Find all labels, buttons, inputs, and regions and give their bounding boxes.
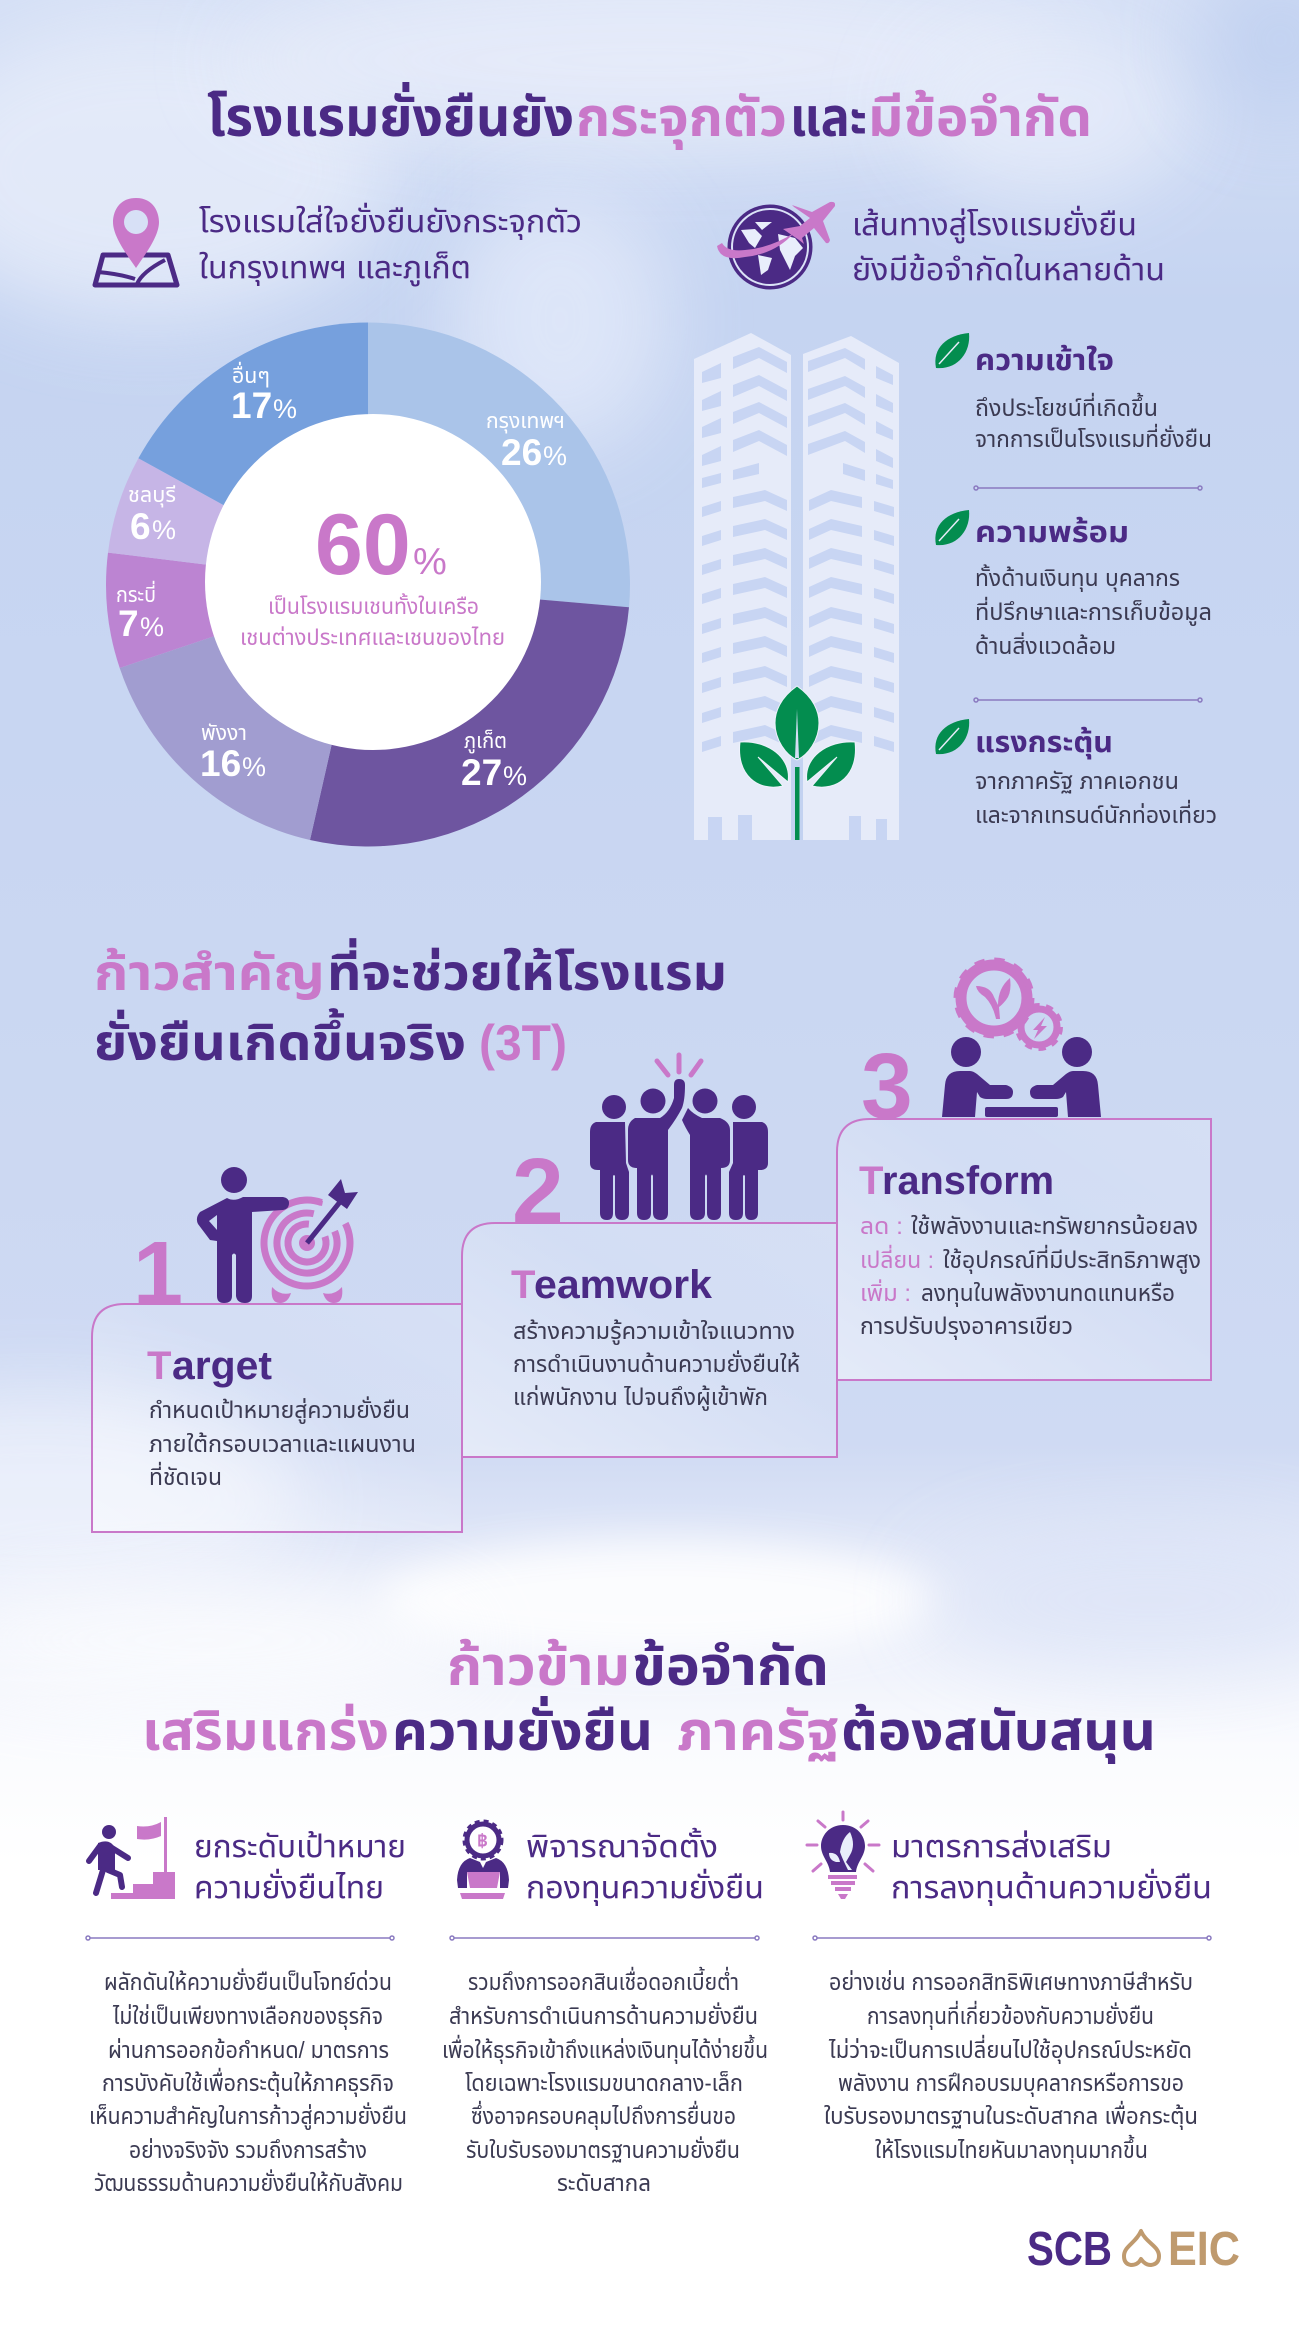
label: Phang Nga: พังงา xyxy=(201,722,247,745)
item: understanding: จากการเป็นโรงแรมที่ยั่งยืน xyxy=(975,423,1212,452)
label: Bangkok: กรุงเทพฯ xyxy=(486,410,565,434)
item: understanding: ถึงประโยชน์ที่เกิดขึ้น xyxy=(975,392,1158,421)
label: Phuket: % xyxy=(503,761,527,791)
card title: T xyxy=(147,1344,171,1388)
item: understanding xyxy=(935,333,1212,452)
subheading: left: โรงแรมใส่ใจยั่งยืนยังกระจุกตัว xyxy=(199,202,582,240)
center stat 60%: เป็นโรงแรมเชนทั้งในเครือ xyxy=(268,592,479,619)
section heading: policy support: เสริมแกร่ง xyxy=(142,1702,389,1762)
column body: ให้โรงแรมไทยหันมาลงทุนมากขึ้น xyxy=(875,2134,1148,2164)
column heading: กองทุนความยั่งยืน xyxy=(526,1868,764,1906)
column heading xyxy=(891,1829,1212,1906)
column body: รับใบรับรองมาตรฐานความยั่งยืน xyxy=(466,2135,740,2163)
label: Phuket: 27 xyxy=(461,752,502,793)
card body: เพิ่ม : xyxy=(860,1278,911,1306)
column heading xyxy=(194,1829,406,1905)
column heading: การลงทุนด้านความยั่งยืน xyxy=(891,1868,1212,1906)
card body: ใช้อุปกรณ์ที่มีประสิทธิภาพสูง xyxy=(943,1244,1201,1275)
item: readiness: ที่ปรึกษาและการเก็บข้อมูล xyxy=(975,596,1212,627)
donut chart xyxy=(106,322,630,846)
column body xyxy=(824,1969,1198,2164)
column 1: raise targets xyxy=(86,1817,407,2196)
icon: globe and plane xyxy=(717,202,835,288)
icon: businessperson with gear and laptop xyxy=(457,1821,509,1899)
item: motivation: จากภาครัฐ ภาคเอกชน xyxy=(975,768,1179,794)
label: Chonburi: 6 xyxy=(130,506,151,547)
column body: โดยเฉพาะโรงแรมขนาดกลาง-เล็ก xyxy=(465,2070,743,2096)
card body xyxy=(149,1395,416,1490)
item: readiness: ด้านสิ่งแวดล้อม xyxy=(975,631,1116,659)
item: motivation: แรงกระตุ้น xyxy=(975,727,1113,759)
card title: T xyxy=(859,1159,883,1203)
column heading xyxy=(526,1827,764,1906)
card body: เปลี่ยน : xyxy=(860,1244,934,1273)
label: Others xyxy=(231,361,297,426)
card title: ransform xyxy=(882,1159,1054,1203)
column body: อย่างเช่น การออกสิทธิพิเศษทางภาษีสำหรับ xyxy=(829,1969,1193,1995)
label: Krabi xyxy=(116,580,164,644)
card body: ลด : xyxy=(860,1213,903,1239)
item: readiness: ทั้งด้านเงินทุน บุคลากร xyxy=(975,563,1180,592)
number 3: 3 xyxy=(861,1034,913,1138)
title xyxy=(207,82,1092,150)
section heading: policy support: ข้อจำกัด xyxy=(632,1637,829,1697)
icon: light bulb with plant xyxy=(807,1812,879,1899)
column 3: investment incentives xyxy=(807,1812,1212,2164)
card body: ลงทุนในพลังงานทดแทนหรือ xyxy=(921,1280,1175,1307)
column body: การลงทุนที่เกี่ยวข้องกับความยั่งยืน xyxy=(867,2000,1154,2030)
illustration: towers with plant xyxy=(694,333,899,840)
column body: การบังคับใช้เพื่อกระตุ้นให้ภาคธุรกิจ xyxy=(102,2067,394,2097)
section heading: policy support xyxy=(142,1637,1156,1764)
label: Krabi: % xyxy=(140,612,164,642)
label: Others: 17 xyxy=(231,385,272,426)
icon: map pin xyxy=(95,198,177,285)
subheading: left xyxy=(199,202,582,286)
section heading: policy support: ก้าวข้าม xyxy=(447,1637,630,1697)
label: Bangkok: 26 xyxy=(501,432,542,473)
card body: ที่ชัดเจน xyxy=(149,1461,222,1490)
item: readiness: ความพร้อม xyxy=(975,517,1129,549)
card 2: Teamwork xyxy=(462,1223,837,1457)
label: Krabi: 7 xyxy=(118,603,139,644)
card body: การดำเนินงานด้านความยั่งยืนให้ xyxy=(513,1349,800,1377)
column body: ผ่านการออกข้อกำหนด/ มาตรการ xyxy=(108,2037,389,2063)
label: Phuket: ภูเก็ต xyxy=(464,728,507,754)
subheading: right: เส้นทางสู่โรงแรมยั่งยืน xyxy=(852,205,1137,243)
label: Others: % xyxy=(273,394,297,424)
label: Bangkok xyxy=(486,410,567,473)
label: Phang Nga xyxy=(200,722,266,784)
column body: ระดับสากล xyxy=(557,2170,651,2196)
column body: ไม่ใช่เป็นเพียงทางเลือกของธุรกิจ xyxy=(112,2003,383,2030)
column 2: sustainability fund xyxy=(442,1821,768,2196)
item: motivation: และจากเทรนด์นักท่องเที่ยว xyxy=(975,799,1217,828)
icon: leaf xyxy=(935,510,969,545)
center stat 60%: 60 xyxy=(315,497,411,593)
item: motivation xyxy=(935,719,1217,828)
icon: businessperson with gear and laptop: ฿ xyxy=(477,1831,488,1852)
logo: SCB EIC: EIC xyxy=(1168,2223,1240,2276)
card body: การปรับปรุงอาคารเขียว xyxy=(860,1313,1073,1340)
column body: ซึ่งอาจครอบคลุมไปถึงการยื่นขอ xyxy=(471,2100,736,2130)
title: กระจุกตัว xyxy=(576,88,787,150)
label: Phuket xyxy=(461,728,527,793)
icon: team high five xyxy=(590,1055,768,1220)
icon: people with gears xyxy=(942,961,1101,1117)
column body: อย่างจริงจัง รวมถึงการสร้าง xyxy=(129,2137,367,2163)
column heading: มาตรการส่งเสริม xyxy=(891,1829,1112,1864)
label: Chonburi: ชลบุรี xyxy=(128,484,176,508)
title: และ xyxy=(790,88,867,148)
column heading: ความยั่งยืนไทย xyxy=(194,1868,384,1905)
label: Krabi: กระบี่ xyxy=(116,580,156,607)
label: Phang Nga: % xyxy=(242,752,266,782)
item: understanding: ความเข้าใจ xyxy=(975,345,1114,377)
section heading: policy support: ความยั่งยืน xyxy=(392,1696,653,1762)
label: Chonburi xyxy=(128,484,176,547)
column heading: ยกระดับเป้าหมาย xyxy=(194,1829,406,1864)
card 1: Target xyxy=(92,1304,462,1532)
card body xyxy=(513,1318,800,1412)
column body xyxy=(89,1967,407,2196)
section heading: 3T: ที่จะช่วยให้โรงแรม xyxy=(327,938,727,1001)
column body: รวมถึงการออกสินเชื่อดอกเบี้ยต่ำ xyxy=(468,1966,739,1995)
column body: ไม่ว่าจะเป็นการเปลี่ยนไปใช้อุปกรณ์ประหยัด xyxy=(828,2034,1192,2064)
number 2: 2 xyxy=(512,1139,564,1243)
card title: eamwork xyxy=(534,1263,713,1307)
label: Others: อื่นๆ xyxy=(232,361,270,388)
title: โรงแรมยั่งยืนยัง xyxy=(207,82,574,148)
label: Phang Nga: 16 xyxy=(200,743,241,784)
column body: พลังงาน การฝึกอบรมบุคลากรหรือการขอ xyxy=(838,2070,1184,2097)
logo: SCB EIC xyxy=(1027,2223,1240,2276)
column body: สำหรับการดำเนินการด้านความยั่งยืน xyxy=(449,2001,758,2029)
card body: ใช้พลังงานและทรัพยากรน้อยลง xyxy=(911,1213,1198,1239)
section heading: policy support: ภาครัฐ xyxy=(677,1702,839,1762)
card title: arget xyxy=(172,1344,272,1388)
icon: leaf xyxy=(935,719,969,754)
icon: leaf xyxy=(935,333,969,368)
title: มีข้อจำกัด xyxy=(868,88,1092,148)
section heading: 3T: ก้าวสำคัญ xyxy=(94,945,325,1001)
section heading: policy support: ต้องสนับสนุน xyxy=(841,1702,1156,1764)
column body: วัฒนธรรมด้านความยั่งยืนให้กับสังคม xyxy=(94,2168,403,2196)
card body: แก่พนักงาน ไปจนถึงผู้เข้าพัก xyxy=(513,1384,768,1412)
card body: กำหนดเป้าหมายสู่ความยั่งยืน xyxy=(149,1395,410,1425)
center stat 60%: เชนต่างประเทศและเชนของไทย xyxy=(240,625,505,650)
section heading: 3T xyxy=(94,938,727,1071)
number 1: 1 xyxy=(133,1224,183,1324)
column body: ใบรับรองมาตรฐานในระดับสากล เพื่อกระตุ้น xyxy=(824,2100,1198,2130)
subheading: left: ในกรุงเทพฯ และภูเก็ต xyxy=(199,250,471,286)
card body: สร้างความรู้ความเข้าใจแนวทาง xyxy=(513,1318,795,1346)
logo: SCB EIC: SCB xyxy=(1027,2223,1112,2276)
subheading: right: ยังมีข้อจำกัดในหลายด้าน xyxy=(852,252,1165,287)
column body: เห็นความสำคัญในการก้าวสู่ความยั่งยืน xyxy=(89,2101,407,2131)
column body xyxy=(442,1966,768,2196)
column heading: พิจารณาจัดตั้ง xyxy=(526,1827,718,1864)
center stat 60%: % xyxy=(413,541,447,583)
column body: เพื่อให้ธุรกิจเข้าถึงแหล่งเงินทุนได้ง่ายขึ้น xyxy=(442,2034,768,2064)
card 3: Transform xyxy=(837,1119,1211,1380)
item: readiness xyxy=(935,510,1212,659)
section heading: 3T: (3T) xyxy=(479,1015,567,1071)
label: Bangkok: % xyxy=(543,441,567,471)
subheading: right xyxy=(852,205,1165,287)
label: Chonburi: % xyxy=(152,515,176,545)
column body: ผลักดันให้ความยั่งยืนเป็นโจทย์ด่วน xyxy=(104,1967,392,1995)
card title: T xyxy=(511,1263,535,1307)
card body: ภายใต้กรอบเวลาและแผนงาน xyxy=(149,1431,416,1457)
card body xyxy=(860,1213,1201,1340)
center stat 60% xyxy=(240,497,505,650)
section heading: 3T: ยั่งยืนเกิดขึ้นจริง xyxy=(94,1008,466,1071)
icon: person with target xyxy=(197,1167,365,1303)
icon: climbing stairs to flag xyxy=(89,1817,175,1899)
